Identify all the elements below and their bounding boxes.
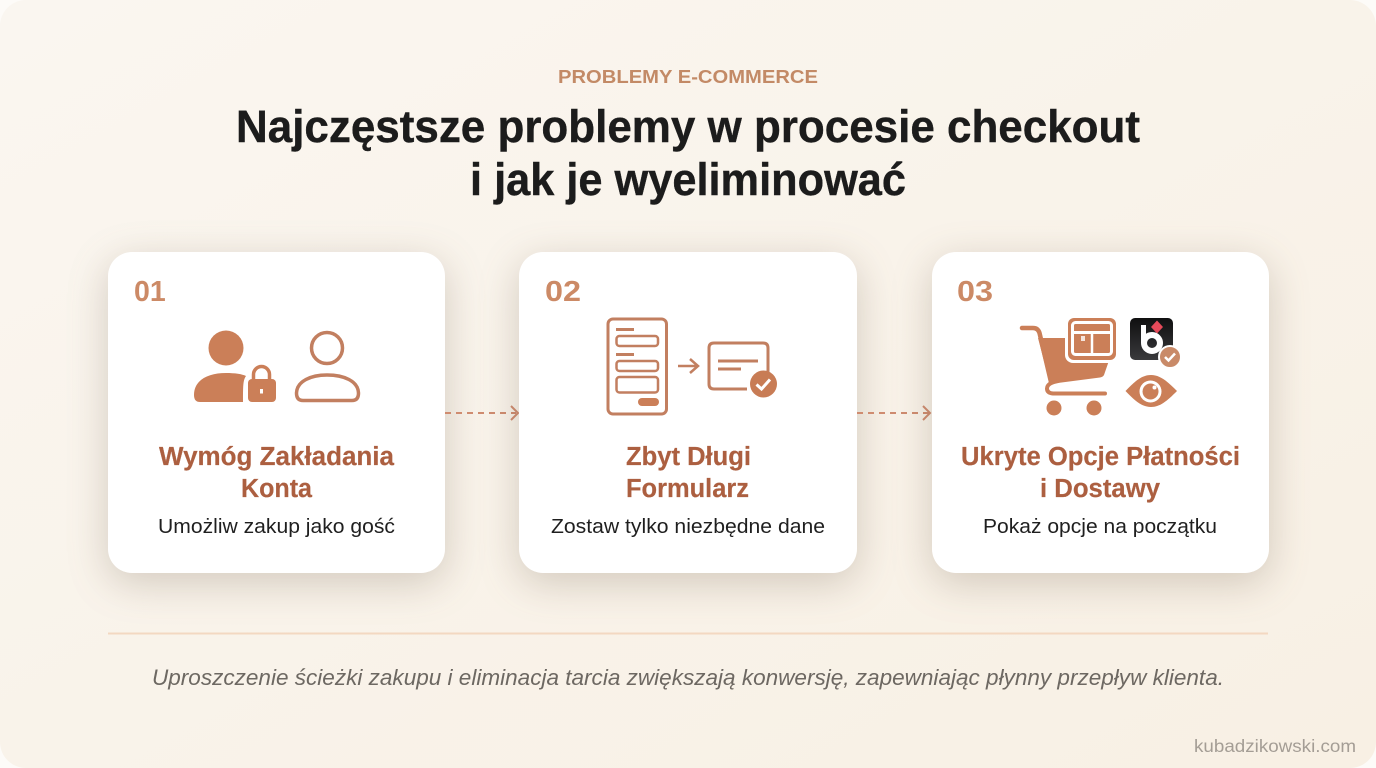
arrow: card 01 to card 02 bbox=[445, 406, 518, 420]
card 02 heading bbox=[626, 443, 751, 503]
icon: cart with delivery window bbox=[1022, 315, 1119, 416]
card 02 text: Zostaw tylko niezbędne dane bbox=[551, 515, 825, 538]
card 03 heading: i Dostawy bbox=[1040, 475, 1161, 503]
card 01 heading: Wymóg Zakładania bbox=[159, 443, 395, 471]
icon: eye bbox=[1126, 375, 1177, 407]
number 02: 02 bbox=[545, 276, 581, 308]
panel: card 03 bbox=[932, 252, 1269, 573]
card 02 heading: Zbyt Długi bbox=[626, 443, 751, 471]
card 03 heading: Ukryte Opcje Płatności bbox=[961, 443, 1240, 471]
panel: card 02 bbox=[519, 252, 857, 573]
title bbox=[236, 101, 1140, 205]
arrow: card 02 to card 03 bbox=[857, 406, 930, 420]
card 01 heading bbox=[159, 443, 395, 503]
card 03 text: Pokaż opcje na początku bbox=[983, 515, 1217, 538]
title: Najczęstsze problemy w procesie checkout bbox=[236, 101, 1140, 152]
card 02 heading: Formularz bbox=[626, 475, 749, 503]
title: i jak je wyeliminować bbox=[470, 154, 906, 205]
card 01 text: Umożliw zakup jako gość bbox=[158, 515, 395, 538]
card 01 heading: Konta bbox=[241, 475, 313, 503]
icon: long form to short form bbox=[608, 319, 777, 414]
icon: payment app tile bbox=[1130, 318, 1181, 368]
card 03 heading bbox=[961, 443, 1240, 503]
footer takeaway: Uproszczenie ścieżki zakupu i eliminacja tarcia zwiększają konwersję, zapewniając płynny przepływ klienta. bbox=[152, 665, 1224, 690]
panel: card 01 bbox=[108, 252, 445, 573]
eyebrow label: PROBLEMY E-COMMERCE bbox=[558, 66, 818, 87]
icon: locked user and guest user bbox=[194, 330, 358, 402]
number 01: 01 bbox=[134, 276, 166, 308]
watermark: kubadzikowski.com bbox=[1194, 736, 1356, 756]
number 03: 03 bbox=[957, 276, 993, 308]
